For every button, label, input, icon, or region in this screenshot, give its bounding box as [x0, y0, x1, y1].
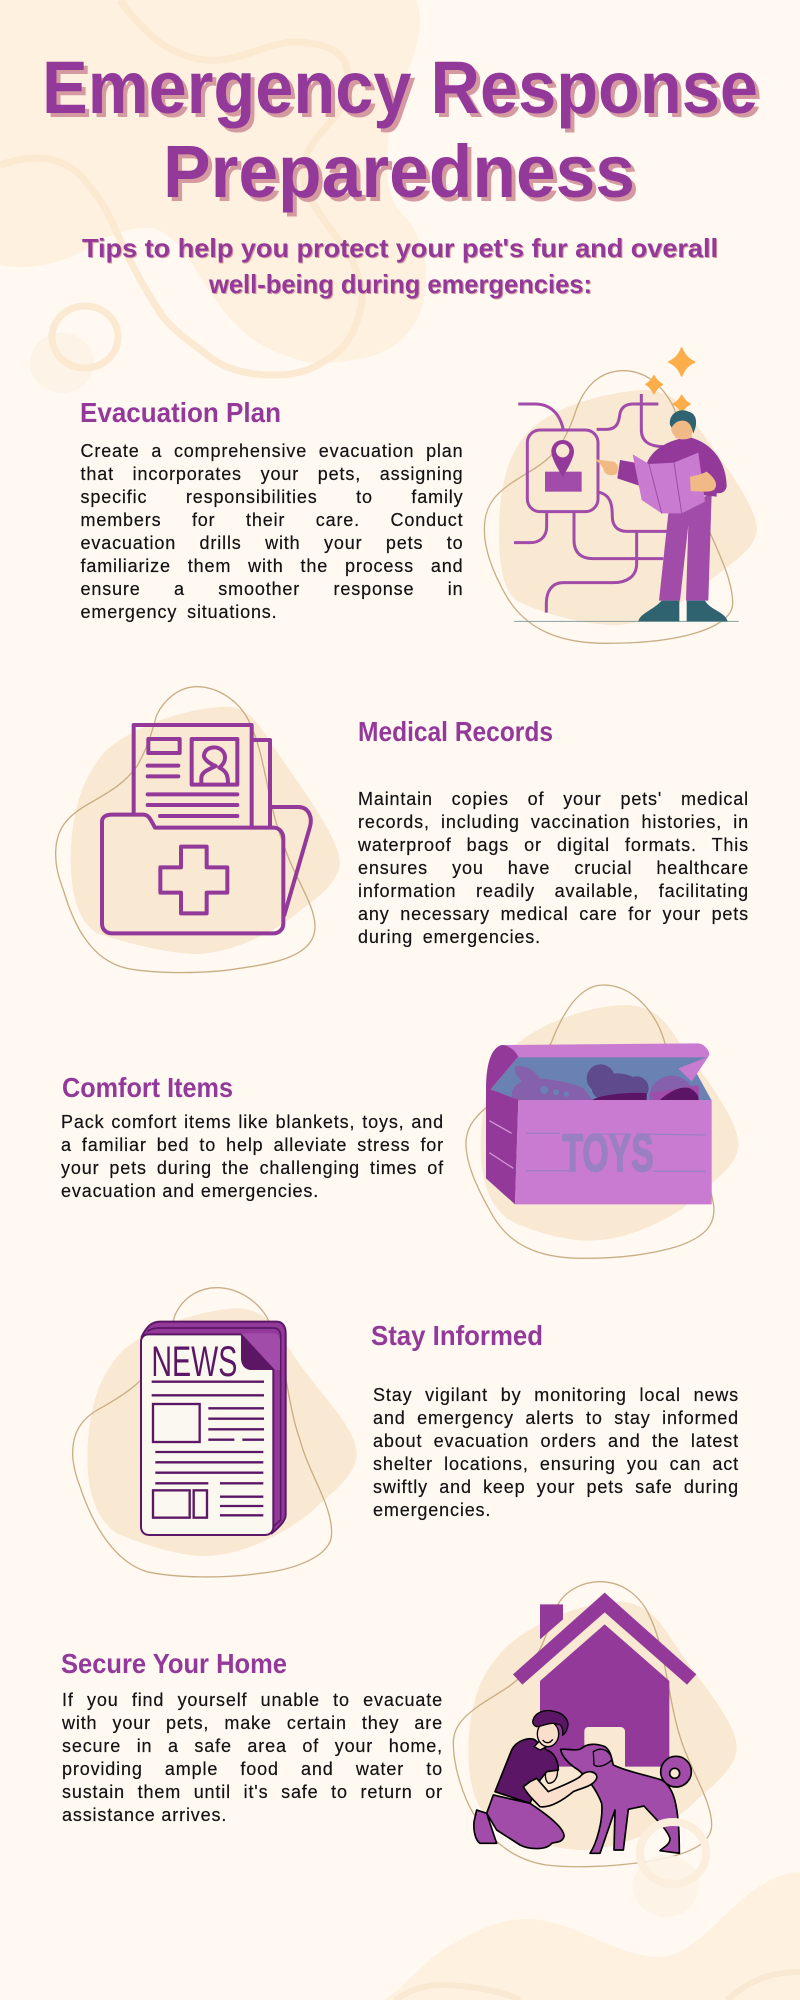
illustration: newspaper: NEWS — [151, 1338, 237, 1386]
text: medical records body: during emergencies. — [358, 927, 541, 947]
illustration: medical folder — [55, 686, 340, 974]
text: medical records body: records, including vaccination histories, in — [358, 812, 749, 832]
title: Preparedness — [163, 130, 635, 213]
text: medical records body: waterproof bags or digital formats. This — [358, 835, 749, 855]
text: stay informed body: shelter locations, ensuring you can act — [373, 1454, 739, 1474]
text: medical records body: ensures you have crucial healthcare — [358, 858, 749, 878]
title: Emergency Response — [46, 50, 762, 133]
text: comfort items body: a familiar bed to help alleviate stress for — [61, 1135, 444, 1155]
text: secure your home body: sustain them until it's safe to return or — [62, 1782, 443, 1802]
subtitle: well-being during emergencies: — [209, 270, 593, 300]
text: stay informed body: emergencies. — [373, 1500, 491, 1520]
text: stay informed body: and emergency alerts to stay informed — [373, 1408, 739, 1428]
text: secure your home body — [62, 1690, 443, 1825]
text: stay informed body: about evacuation orders and the latest — [373, 1431, 739, 1451]
text: evacuation plan body: Create a comprehensive evacuation plan — [80, 441, 464, 461]
illustration: person petting dog at house — [452, 1581, 737, 1868]
text: comfort items body: your pets during the challenging times of — [61, 1158, 444, 1178]
text: stay informed body: swiftly and keep your pets safe during — [373, 1477, 739, 1497]
text: comfort items body: Pack comfort items like blankets, toys, and — [61, 1112, 444, 1132]
text: evacuation plan body: emergency situations. — [80, 602, 278, 622]
subtitle — [82, 233, 719, 300]
heading: evacuation plan: Evacuation Plan — [80, 397, 281, 428]
text: evacuation plan body: ensure a smoother response in — [80, 579, 464, 599]
text: evacuation plan body: specific responsibilities to family — [80, 487, 464, 507]
text: evacuation plan body: familiarize them with the process and — [80, 556, 464, 576]
text: evacuation plan body: members for their care. Conduct — [80, 510, 464, 530]
text: secure your home body: secure in a safe area of your home, — [62, 1736, 443, 1756]
text: medical records body: information readily available, facilitating — [358, 881, 749, 901]
text: secure your home body: with your pets, make certain they are — [62, 1713, 443, 1733]
illustration: toy box: TOYS — [562, 1124, 654, 1183]
panel: secure your home — [61, 1581, 737, 1868]
text: stay informed body — [373, 1385, 739, 1520]
panel: medical records — [55, 686, 749, 974]
text: medical records body: any necessary medical care for your pets — [358, 904, 749, 924]
text: evacuation plan body: evacuation drills with your pets to — [80, 533, 464, 553]
illustration: toy box — [465, 984, 738, 1259]
illustration: newspaper — [72, 1287, 357, 1578]
subtitle: well-being during emergencies: — [208, 269, 592, 299]
text: comfort items body — [60, 1112, 444, 1202]
text: evacuation plan body: that incorporates your pets, assigning — [80, 464, 464, 484]
text: stay informed body: Stay vigilant by monitoring local news — [373, 1385, 739, 1405]
decorative ring and circle at bottom — [633, 1818, 710, 1917]
text: medical records body: Maintain copies of your pets' medical — [358, 789, 749, 809]
text: secure your home body: assistance arrives. — [62, 1805, 227, 1825]
panel: evacuation plan — [80, 347, 757, 644]
title: Preparedness — [167, 134, 639, 217]
text: secure your home body: providing ample food and water to — [62, 1759, 443, 1779]
subtitle: Tips to help you protect your pet's fur and overall — [83, 234, 719, 264]
heading: stay informed: Stay Informed — [371, 1320, 543, 1351]
title — [42, 46, 762, 217]
subtitle: Tips to help you protect your pet's fur and overall — [82, 233, 718, 263]
text: medical records body — [358, 789, 749, 948]
panel: stay informed — [72, 1287, 739, 1578]
text: comfort items body: evacuation and emergencies. — [61, 1181, 319, 1201]
title: Emergency Response — [42, 46, 758, 129]
text: secure your home body: If you find yourself unable to evacuate — [62, 1690, 443, 1710]
illustration: man reading map — [484, 347, 757, 644]
text: evacuation plan body — [80, 441, 464, 622]
panel: comfort items — [60, 984, 738, 1259]
